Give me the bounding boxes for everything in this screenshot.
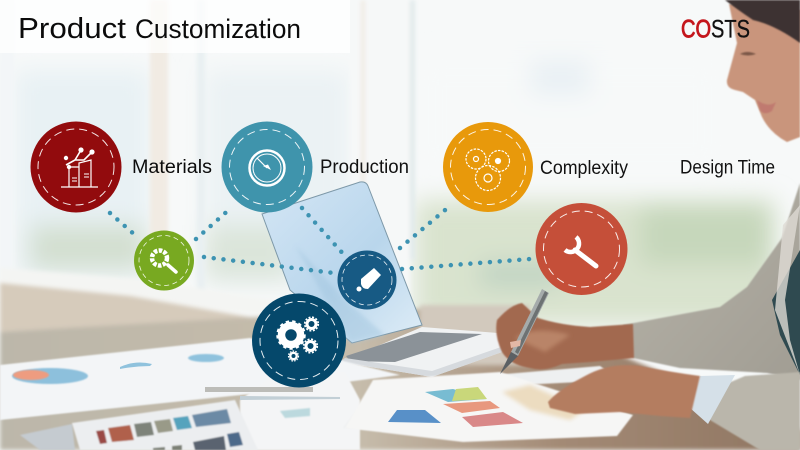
label: complexity: Complexity (540, 158, 628, 179)
icon: outlined gears (466, 149, 510, 190)
icon: gears (278, 317, 318, 361)
pen (500, 289, 549, 374)
icon: wrench (565, 237, 596, 266)
node: production (222, 122, 312, 212)
label: design time: Design Time (680, 158, 775, 178)
photo: colour swatch booklet (20, 400, 258, 450)
photo: design documents with colour blocks (343, 366, 633, 442)
eye (740, 52, 756, 56)
lips (757, 100, 776, 113)
hair (725, 0, 800, 43)
label: materials: Materials (132, 157, 212, 178)
icon: gauge (250, 150, 284, 186)
title banner: Customization (135, 14, 301, 44)
node: design time (wrench) (536, 203, 628, 295)
label: production: Production (320, 157, 409, 178)
node: small navy tube (338, 250, 396, 310)
icon: magnifier (152, 250, 176, 272)
jacket (623, 183, 800, 380)
icon: tube (356, 268, 381, 292)
photo: laptop (262, 182, 502, 377)
photo: desk papers with pie chart (0, 338, 400, 450)
face (727, 4, 800, 142)
title banner: Product (18, 13, 126, 45)
node: large navy gears (252, 294, 346, 388)
resting hand (548, 365, 700, 418)
title banner (0, 0, 350, 53)
node: materials (30, 122, 122, 212)
writing hand (496, 303, 634, 369)
node: green magnifier (134, 230, 194, 290)
dotted connector lines (110, 205, 530, 273)
costs heading: COSTS (681, 16, 750, 44)
node: complexity (443, 122, 533, 212)
photo: woman at right with arm, hands and pen (496, 0, 800, 450)
icon: bar chart with trend (61, 148, 98, 187)
